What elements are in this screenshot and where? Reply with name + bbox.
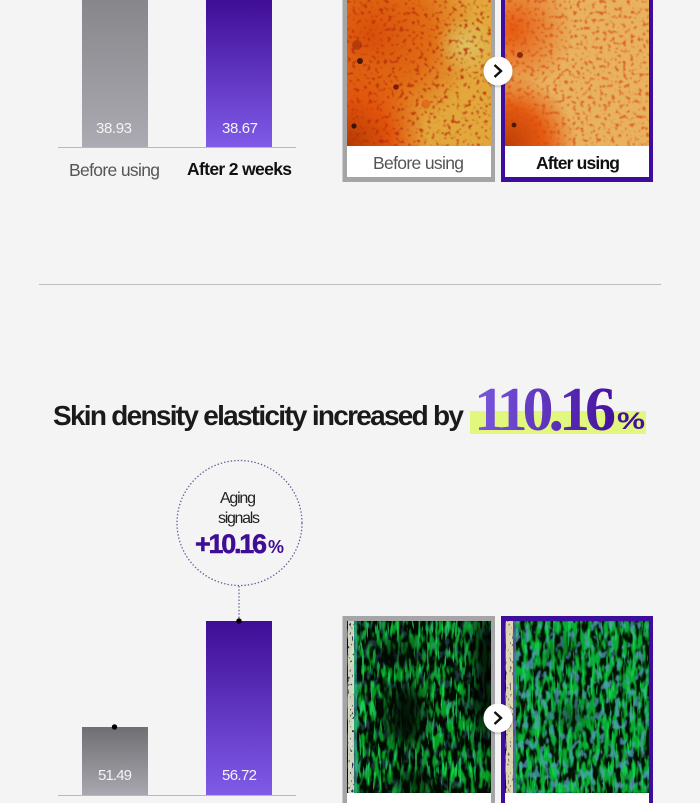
marker dot: after — [236, 618, 242, 624]
heading: skin density elasticity: Skin density elasticity increased by — [53, 400, 464, 431]
photo panel: after using, orange skin scan — [501, 0, 653, 182]
heading: skin density elasticity — [53, 376, 646, 444]
photo panel: before using, green density scan — [342, 610, 498, 803]
callout: aging signals: signals — [218, 510, 260, 527]
icon: arrow between orange photos — [484, 56, 512, 86]
callout: aging signals: % — [268, 537, 284, 557]
bar chart: top comparison — [58, 0, 296, 180]
label: after 2 weeks: After 2 weeks — [187, 159, 292, 179]
bar chart: density comparison — [58, 618, 296, 796]
bar: after 2 weeks — [206, 0, 272, 147]
number: 110.16: 110.16 — [474, 376, 616, 444]
caption: after using: After using — [536, 153, 620, 173]
caption: before using: Before using — [373, 153, 464, 173]
bar: before using — [82, 0, 148, 147]
marker dot: before — [112, 724, 117, 730]
highlight behind number — [470, 411, 646, 434]
photo panel: before using, orange skin scan — [342, 0, 495, 182]
photo panel: after using, green density scan — [501, 616, 653, 803]
label: before using: Before using — [69, 160, 160, 180]
value: 51.49: 51.49 — [98, 767, 132, 784]
icon: arrow between green photos — [484, 704, 512, 732]
value: 56.72: 56.72 — [222, 767, 257, 784]
callout: aging signals: +10.16 — [195, 529, 267, 559]
percent sign: % — [617, 408, 645, 435]
callout: aging signals: Aging — [220, 490, 256, 507]
callout: aging signals — [177, 460, 302, 620]
bar: before — [82, 727, 148, 795]
bar: after — [206, 621, 272, 795]
value: 38.93: 38.93 — [96, 120, 132, 137]
value: 38.67: 38.67 — [222, 120, 258, 137]
